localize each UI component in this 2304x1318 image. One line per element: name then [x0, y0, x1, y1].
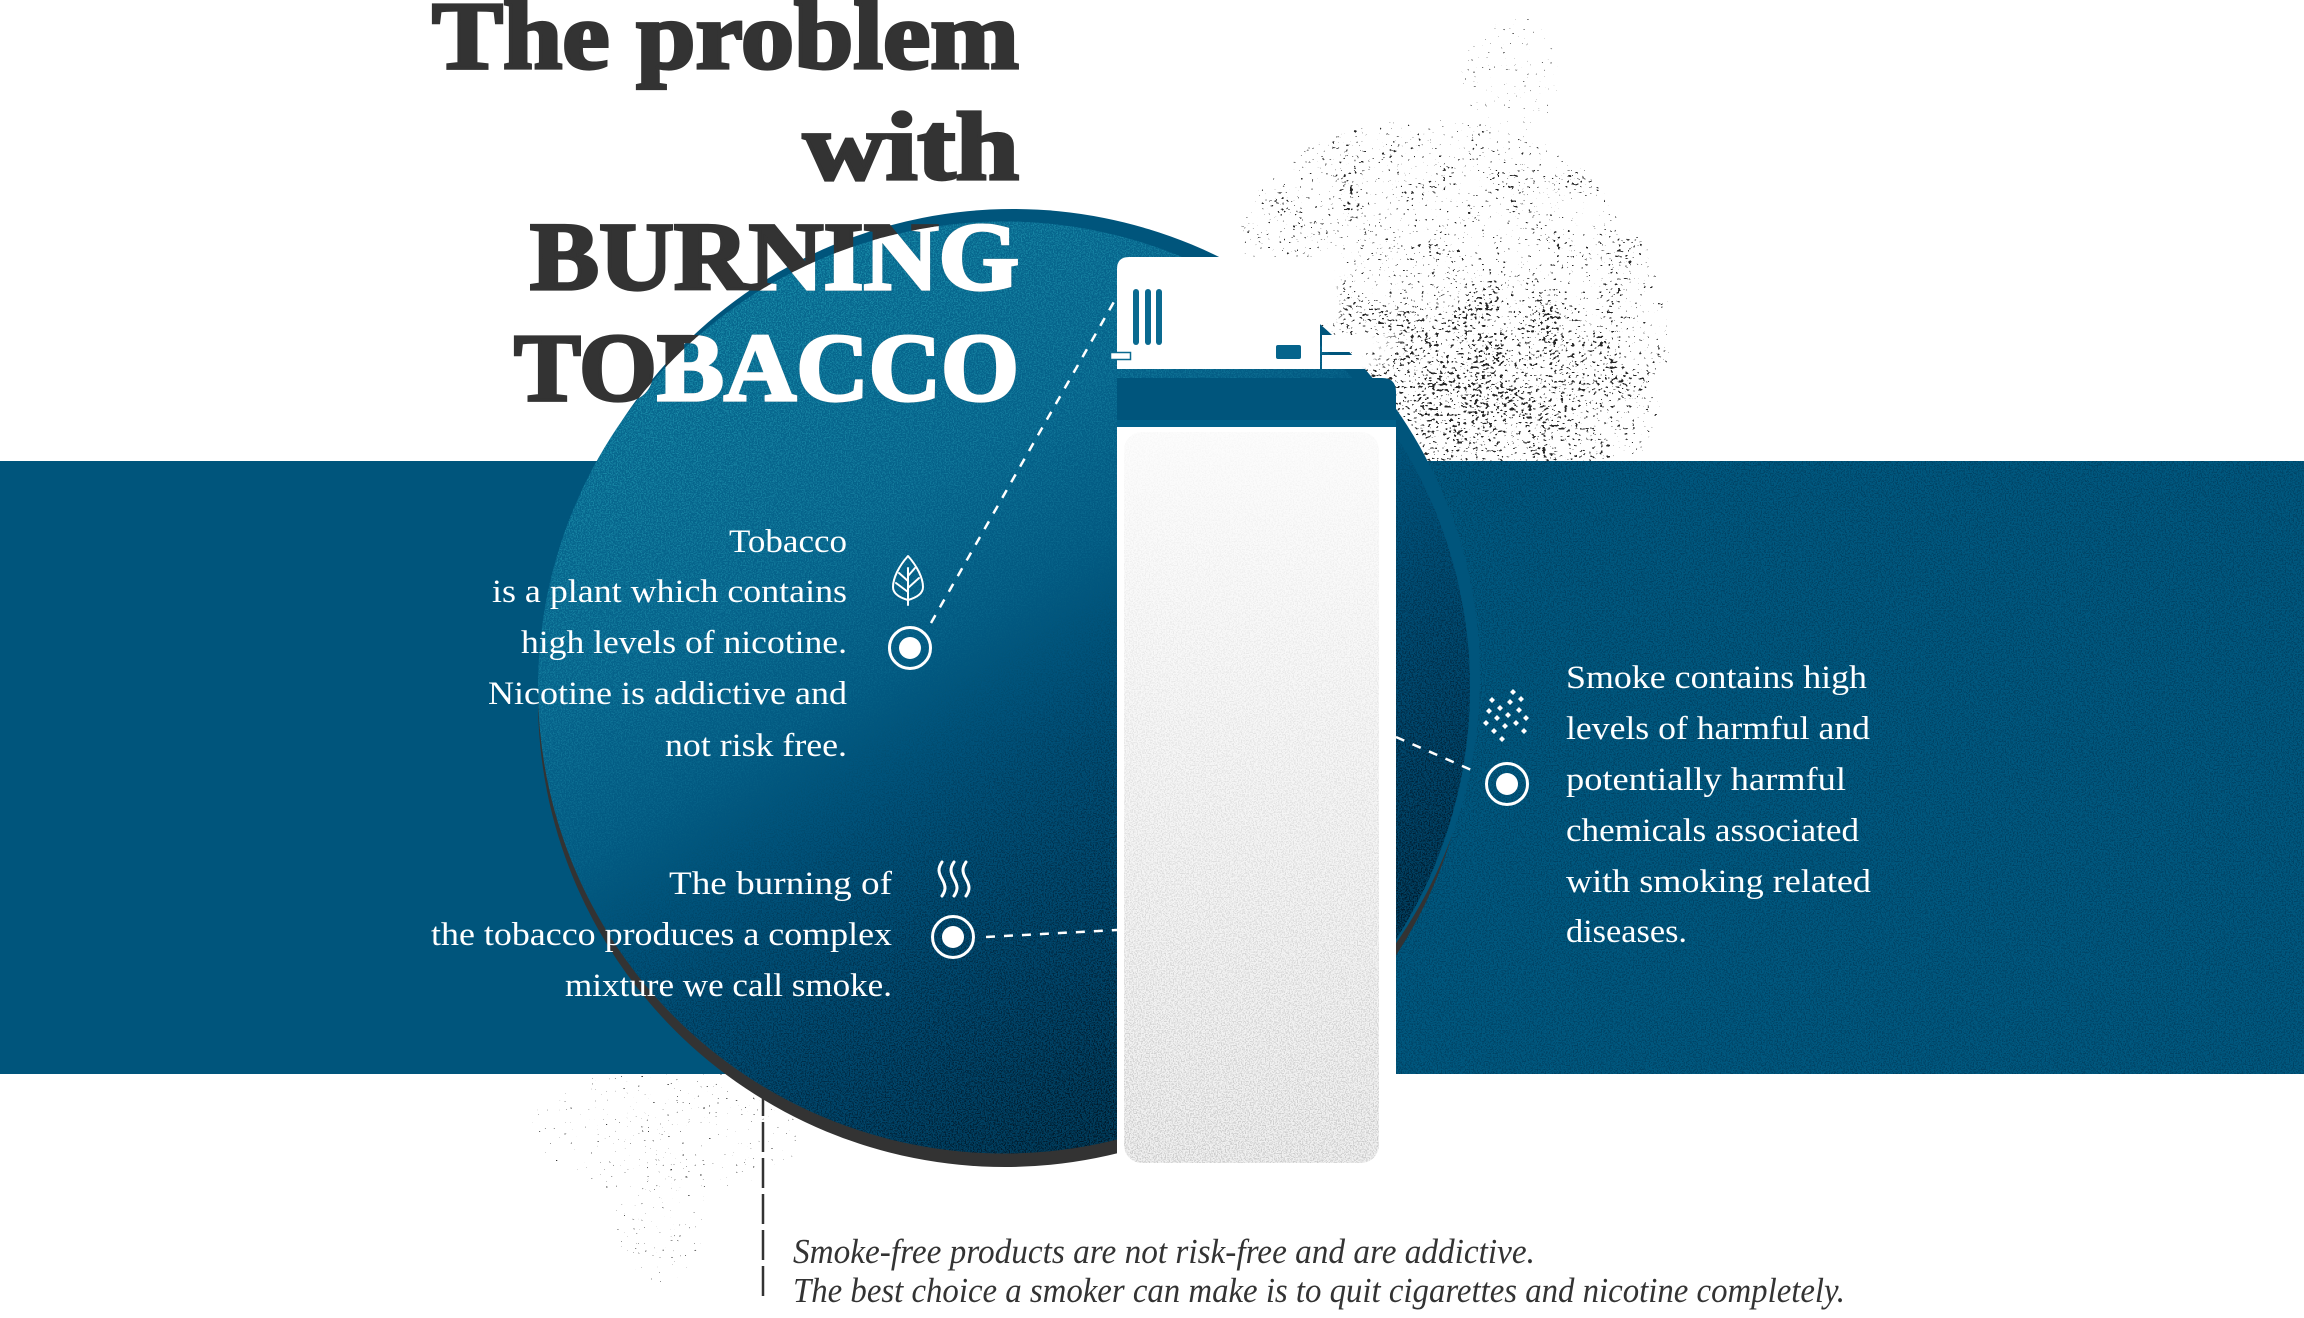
- burning text: the tobacco produces a complex: [431, 917, 893, 953]
- dashed connector to cap: [931, 300, 1115, 623]
- dashed connector to lighter: [986, 930, 1117, 937]
- smoke text: levels of harmful and: [1566, 711, 1871, 747]
- smoke text: potentially harmful: [1566, 762, 1846, 798]
- callout: burning: [431, 862, 1117, 1004]
- tobacco text: [488, 524, 848, 764]
- callout: tobacco: [488, 300, 1115, 764]
- cap vent slots: [1133, 289, 1162, 345]
- tobacco text: is a plant which contains: [492, 574, 847, 610]
- title white layer inside circle: [638, 224, 1018, 403]
- marker ring: [1486, 764, 1528, 804]
- footnote: [793, 1232, 1845, 1310]
- tobacco text: not risk free.: [665, 728, 847, 764]
- smoke text: Smoke contains high: [1566, 660, 1868, 696]
- burning text: The burning of: [669, 866, 892, 902]
- callout: smoke: [1396, 660, 1872, 950]
- cap fade over smoke: [1320, 257, 1346, 323]
- smoke text: [1566, 660, 1872, 950]
- smoke text: chemicals associated: [1566, 813, 1860, 849]
- icon: particle cluster: [1483, 689, 1529, 742]
- cap right lower arm: [1322, 355, 1394, 369]
- lighter collar lower edge: [1117, 420, 1396, 427]
- title dark layer: TOBACCO: [514, 314, 1019, 421]
- footnote: Smoke-free products are not risk-free and are addictive.: [793, 1232, 1535, 1271]
- title dark layer: [432, 0, 1019, 421]
- title: [432, 0, 1019, 421]
- dark shadow circle: [538, 233, 1472, 1167]
- lighter: [1110, 257, 1410, 1172]
- teal back circle: [546, 209, 1480, 1143]
- tobacco text: high levels of nicotine.: [521, 625, 847, 661]
- band: left: [0, 461, 1117, 1074]
- smoke cloud above lighter: [1240, 120, 1670, 525]
- lighter body shell: [1124, 432, 1379, 1163]
- marker ring: [932, 916, 974, 958]
- footnote: The best choice a smoker can make is to quit cigarettes and nicotine completely.: [793, 1271, 1845, 1310]
- cap window: [1276, 345, 1301, 359]
- smoke text: diseases.: [1566, 914, 1687, 950]
- tobacco text: Nicotine is addictive and: [488, 676, 848, 712]
- burning text: mixture we call smoke.: [565, 968, 892, 1004]
- cap small tab: [1110, 352, 1130, 360]
- lighter cap: [1117, 257, 1320, 369]
- tobacco text: Tobacco: [729, 524, 847, 560]
- dashed connector to lighter: [1396, 737, 1476, 772]
- faint smoke plume at top: [1460, 15, 1560, 135]
- marker ring: [890, 628, 930, 668]
- gradient grain circle: [538, 222, 1470, 1154]
- title white layer inside circle: TOBACCO: [514, 314, 1019, 421]
- smoke text: with smoking related: [1566, 864, 1872, 900]
- title dark layer: BURNING: [530, 203, 1019, 310]
- smoke cloud below band: [530, 1065, 810, 1285]
- lighter collar: [1117, 378, 1396, 420]
- burning text: [431, 866, 893, 1004]
- icon: heat waves: [939, 862, 969, 896]
- icon: leaf: [893, 556, 923, 605]
- title dark layer: with: [803, 93, 1019, 200]
- title white layer inside circle: BURNING: [530, 203, 1019, 310]
- band: right: [1396, 461, 2304, 1074]
- cap right upper arm: [1322, 335, 1410, 352]
- vertical dashed rule: [762, 1086, 764, 1302]
- lighter body mask: [1117, 427, 1396, 1172]
